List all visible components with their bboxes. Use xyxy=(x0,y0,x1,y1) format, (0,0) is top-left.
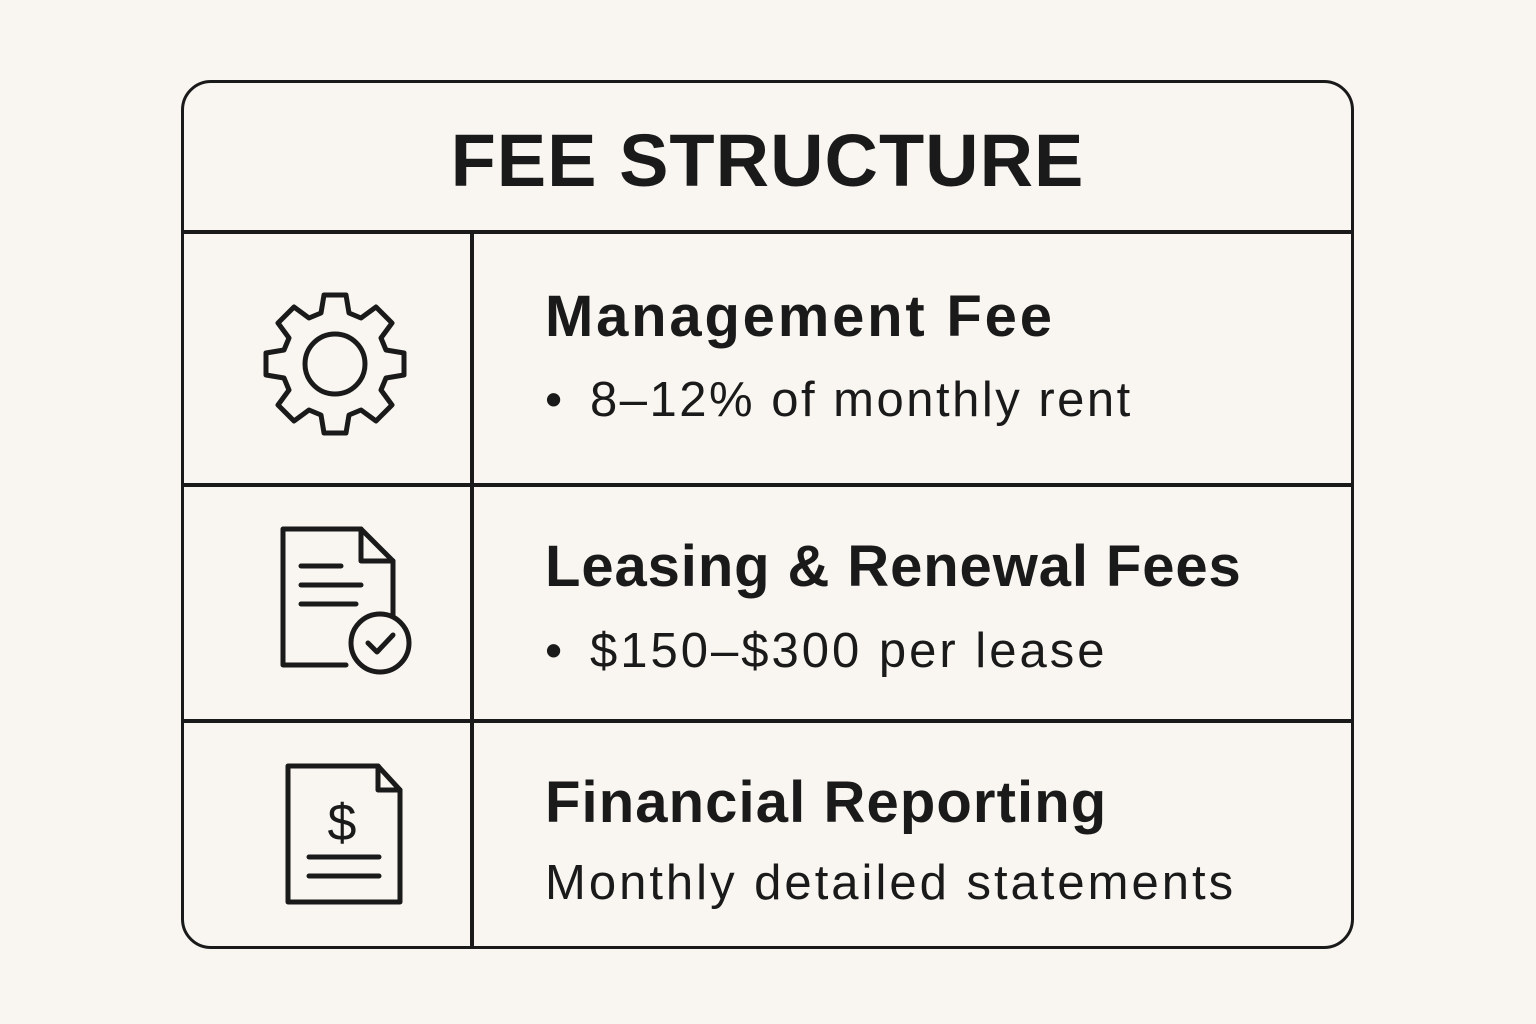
icon: financial document with dollar: $ xyxy=(328,794,357,852)
heading: financial reporting: Financial Reporting xyxy=(545,770,1107,835)
description: statements: Monthly detailed statements xyxy=(545,856,1236,910)
bullet: lease fee: • xyxy=(545,624,562,678)
heading: management fee: Management Fee xyxy=(545,284,1055,349)
text block: financial reporting xyxy=(545,770,1236,910)
heading: leasing & renewal: Leasing & Renewal Fees xyxy=(545,534,1242,599)
text block: leasing & renewal fees xyxy=(545,534,1242,678)
panel: fee structure table xyxy=(181,80,1354,949)
bullet: management fee rate: 8–12% of monthly rent xyxy=(590,373,1133,427)
bullet: management fee rate: • xyxy=(545,373,562,427)
icon: lease document with check xyxy=(280,526,412,674)
title: FEE STRUCTURE xyxy=(451,119,1084,202)
icon: gear xyxy=(264,292,406,436)
icon: financial document with dollar xyxy=(286,764,402,904)
bullet: lease fee: $150–$300 per lease xyxy=(590,624,1107,678)
text block: management fee xyxy=(545,284,1133,427)
